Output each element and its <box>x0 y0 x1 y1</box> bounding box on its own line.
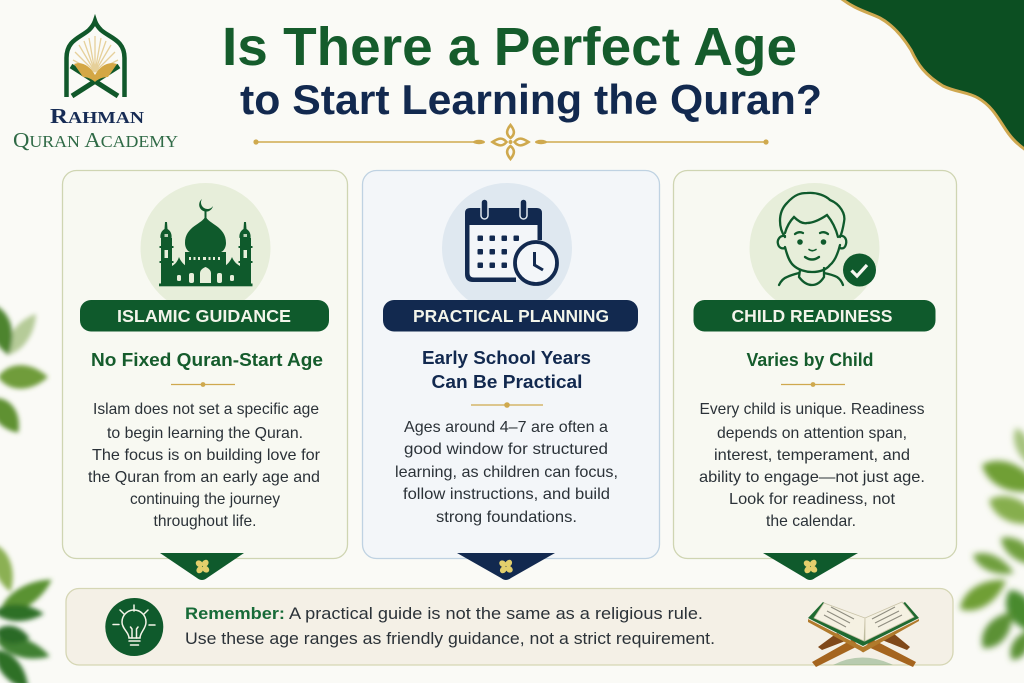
card heading: No Fixed Quran-Start Age <box>91 349 323 370</box>
body text: continuing the journey <box>130 491 280 508</box>
panel: child readiness <box>674 170 956 580</box>
body text: the calendar. <box>766 513 856 530</box>
card heading: Early School Years <box>422 347 591 368</box>
panel: islamic guidance <box>62 170 348 580</box>
decorative leaves: right <box>954 425 1024 664</box>
book pages <box>814 603 865 641</box>
title ornament divider <box>253 125 769 159</box>
decorative corner: green wave with gold edge <box>838 0 1024 153</box>
card heading <box>422 347 591 392</box>
pill label: PRACTICAL PLANNING <box>413 306 609 326</box>
body text: follow instructions, and build <box>403 486 610 503</box>
logo sun rays <box>73 36 118 72</box>
card heading: Varies by Child <box>746 349 874 370</box>
icon: light bulb <box>105 598 163 656</box>
card background <box>362 170 660 558</box>
pill label: CHILD READINESS <box>732 306 892 326</box>
pill label <box>383 300 638 332</box>
body text: Ages around 4–7 are often a <box>404 419 608 436</box>
card background <box>62 170 348 558</box>
body text: learning, as children can focus, <box>395 464 618 481</box>
pill label <box>694 300 936 332</box>
heading divider <box>171 382 235 387</box>
logo book <box>74 63 117 82</box>
callout text: Use these age ranges as friendly guidance, not a strict requirement. <box>185 630 715 648</box>
body text: strong foundations. <box>436 509 577 526</box>
card background <box>674 170 956 558</box>
pill label: ISLAMIC GUIDANCE <box>117 306 291 326</box>
pointer tab with flower <box>763 553 858 580</box>
heading divider <box>781 382 845 387</box>
body text <box>88 401 320 530</box>
stand front legs <box>812 639 858 667</box>
title line 1: Is There a Perfect Age <box>222 17 797 77</box>
stand shadow <box>833 658 893 665</box>
body text <box>699 401 925 530</box>
pointer tab with flower <box>160 553 244 580</box>
body text: Islam does not set a specific age <box>93 401 319 418</box>
callout text <box>185 605 715 648</box>
stand back legs <box>818 633 848 650</box>
icon: open quran on wooden stand <box>808 602 919 667</box>
callout: remember <box>66 588 953 667</box>
book cover <box>808 602 919 646</box>
pill label <box>80 300 329 332</box>
body text: ability to engage—not just age. <box>699 469 925 486</box>
decorative leaves: left lower <box>0 542 57 683</box>
title <box>222 17 822 123</box>
logo subtitle: QURAN ACADEMY <box>13 128 178 152</box>
logo stand <box>71 66 119 96</box>
callout text: Remember: A practical guide is not the same as a religious rule. <box>185 605 703 623</box>
heading divider <box>471 402 543 408</box>
logo: Rahman Quran Academy <box>13 21 178 152</box>
body text: Look for readiness, not <box>729 491 896 508</box>
pointer tab with flower <box>457 553 555 580</box>
body text: Every child is unique. Readiness <box>700 401 925 418</box>
panel: practical planning <box>362 170 660 580</box>
logo arch <box>66 21 124 97</box>
title line 2: to Start Learning the Quran? <box>240 76 822 123</box>
body text: throughout life. <box>154 513 256 530</box>
body text: to begin learning the Quran. <box>107 425 303 442</box>
logo name: RAHMAN <box>50 104 144 128</box>
body text: depends on attention span, <box>717 425 907 442</box>
icon: child with check badge <box>750 183 880 313</box>
icon: calendar with clock <box>442 183 572 313</box>
body text: good window for structured <box>404 441 608 458</box>
body text: interest, temperament, and <box>714 447 910 464</box>
callout background <box>66 588 953 665</box>
card heading: Can Be Practical <box>432 371 582 392</box>
body text: The focus is on building love for <box>92 447 320 464</box>
body text <box>395 419 618 526</box>
body text: the Quran from an early age and <box>88 469 320 486</box>
decorative leaves: left upper <box>0 302 48 439</box>
icon: mosque <box>140 183 270 313</box>
